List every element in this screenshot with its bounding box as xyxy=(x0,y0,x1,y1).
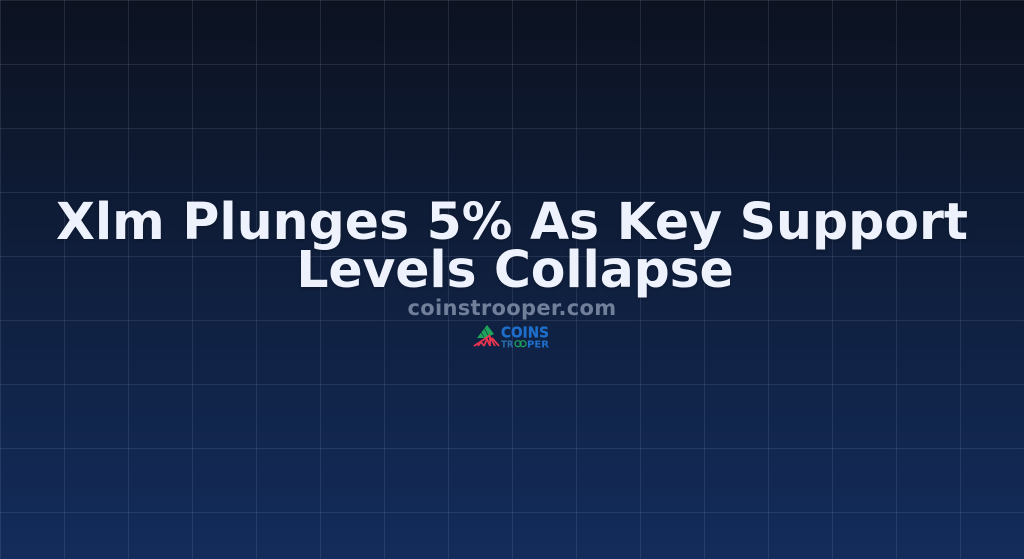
logo: Coins Trooper xyxy=(474,324,549,350)
icon: green rising peak xyxy=(477,325,494,338)
title: Levels Collapse xyxy=(296,240,734,299)
title: Xlm Plunges 5% As Key Support xyxy=(56,192,968,251)
title xyxy=(56,192,968,299)
icon: red falling stripes xyxy=(474,336,499,346)
source website: coinstrooper.com xyxy=(408,296,616,320)
logo rings: OO xyxy=(515,341,526,347)
